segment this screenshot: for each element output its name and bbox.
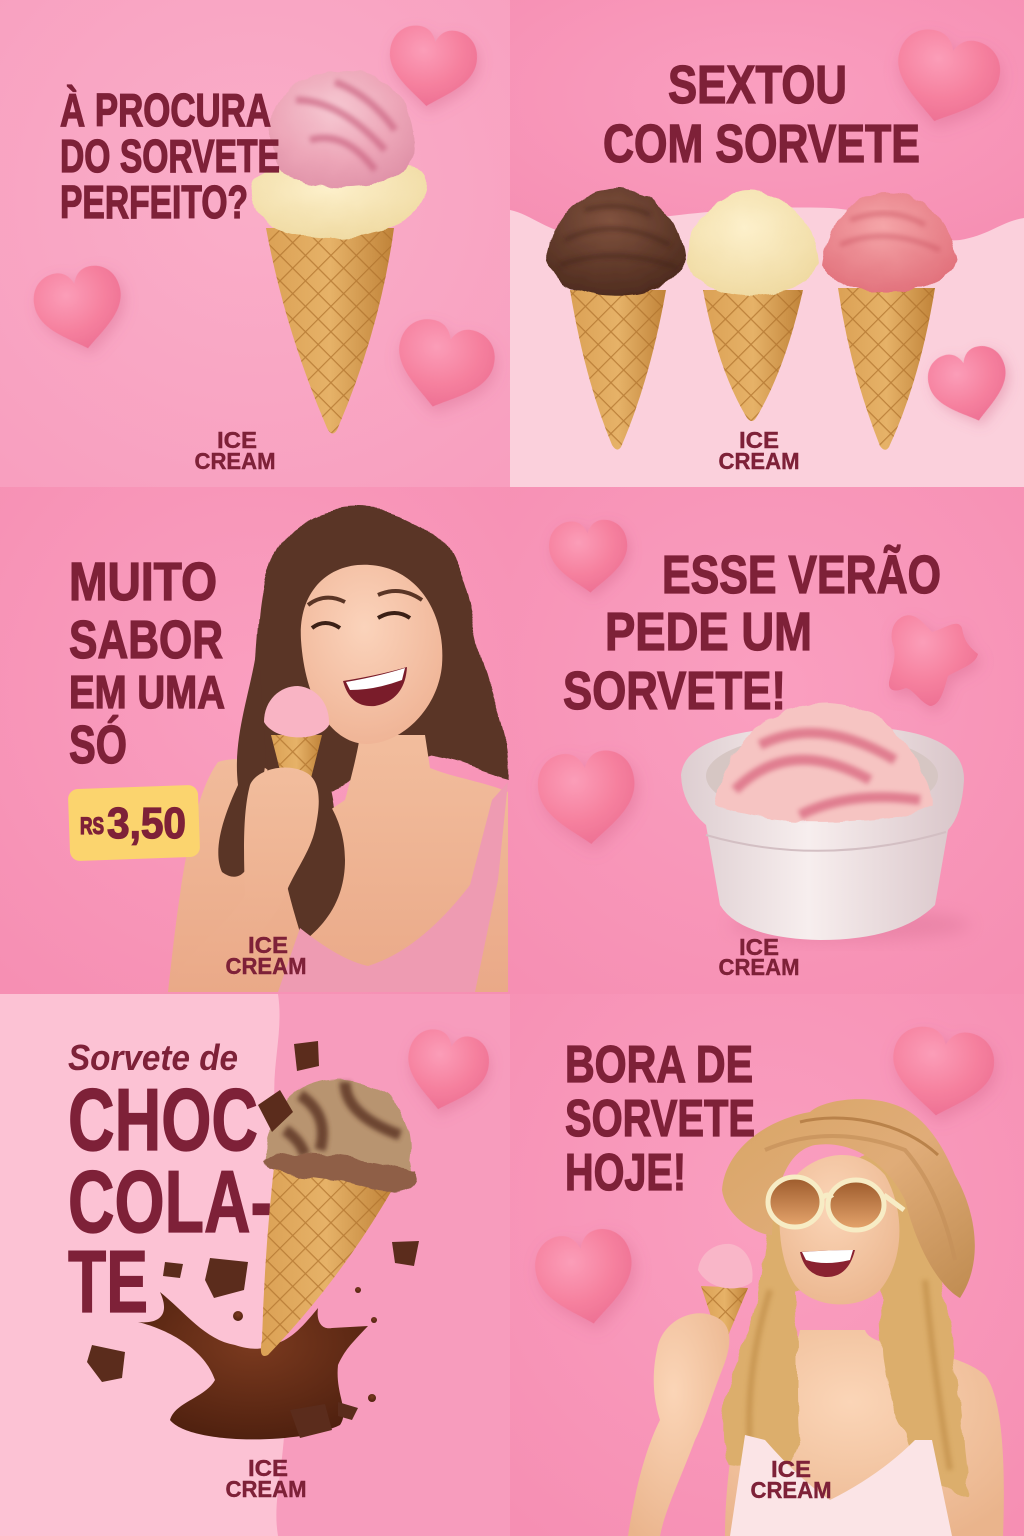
heading: HOJE!: [565, 1144, 686, 1202]
logo: [750, 1456, 832, 1503]
heading: COM SORVETE: [603, 114, 920, 174]
icon: heart top: [383, 22, 481, 112]
heading: SABOR: [69, 610, 223, 670]
hair strand left of arm: [218, 640, 266, 877]
hand and forearm: [168, 768, 319, 992]
heading: SORVETE!: [563, 661, 786, 721]
woman with cone: [168, 506, 510, 992]
icon: heart left: [535, 748, 640, 848]
heading: À PROCURA: [60, 84, 271, 136]
body: [725, 1330, 1004, 1536]
ice cream cone: [251, 70, 427, 434]
hair: [723, 1150, 968, 1495]
hand and forearm: [628, 1313, 729, 1536]
heading: [563, 545, 941, 721]
hat: [722, 1099, 975, 1298]
logo: ICE: [739, 427, 779, 453]
panel: esse verão: [510, 487, 1024, 994]
logo: ICE: [217, 427, 257, 453]
heading: [69, 552, 225, 775]
logo: CREAM: [750, 1477, 832, 1503]
cone in hand: [264, 686, 329, 790]
panel: perfect ice cream: [0, 0, 510, 487]
logo: ICE: [248, 1455, 288, 1481]
heading: [68, 1037, 272, 1331]
price tag: 3,50: [107, 799, 186, 848]
chocolate splash: [138, 1287, 377, 1439]
top: [730, 1435, 952, 1536]
heading: DO SORVETE: [60, 130, 280, 182]
heading: ESSE VERÃO: [662, 545, 941, 605]
logo: ICE: [771, 1456, 811, 1482]
chocolate cone: [261, 1079, 416, 1356]
logo: [226, 1455, 306, 1502]
panel: chocolate: [0, 994, 510, 1536]
icon: heart right: [386, 313, 501, 419]
heading: EM UMA: [69, 666, 225, 718]
heading: COLA-: [68, 1152, 272, 1251]
chocolate cone: [548, 189, 685, 450]
dress: [278, 782, 508, 992]
logo: [226, 932, 306, 979]
icon: heart: [399, 1025, 494, 1118]
heading: SORVETE: [565, 1090, 755, 1148]
price tag: [68, 785, 200, 861]
hair shading: [749, 1280, 950, 1470]
heading: CHOC: [68, 1070, 258, 1169]
logo: CREAM: [226, 953, 306, 979]
price tag: RS: [80, 813, 104, 840]
icon: heart left: [29, 261, 131, 357]
logo: [718, 934, 800, 980]
logo: CREAM: [194, 448, 276, 474]
vanilla cone: [686, 192, 819, 421]
icon: heart top: [886, 1023, 998, 1122]
face: [780, 1155, 899, 1304]
logo: ICE: [248, 932, 288, 958]
heading: BORA DE: [565, 1036, 753, 1094]
logo: CREAM: [718, 448, 800, 474]
heading: PERFEITO?: [60, 176, 248, 228]
logo: [194, 427, 276, 474]
icon: star: [889, 615, 978, 706]
ice cream cup: [681, 702, 970, 941]
heading: SEXTOU: [668, 55, 847, 115]
heading: TE: [68, 1232, 148, 1331]
icon: heart top: [885, 23, 1007, 134]
woman with hat: [628, 1099, 1004, 1536]
logo: [718, 427, 800, 474]
hair strand right of arm: [267, 740, 345, 942]
panel: sextou: [510, 0, 1024, 487]
face: [301, 565, 442, 744]
logo: CREAM: [226, 1476, 306, 1502]
icon: heart top: [548, 519, 630, 595]
icon: heart left: [530, 1225, 641, 1332]
heading: Sorvete de: [68, 1037, 238, 1078]
hair back: [235, 506, 510, 942]
strawberry cone: [822, 192, 957, 450]
heading: [565, 1036, 755, 1202]
cone in hand: [698, 1244, 753, 1350]
logo: ICE: [739, 934, 779, 960]
panel: bora de sorvete: [510, 994, 1024, 1536]
heading: [60, 84, 280, 228]
panel: muito sabor: [0, 487, 510, 994]
icon: heart bottom: [923, 341, 1017, 431]
body: [168, 735, 508, 992]
chocolate chunks: [87, 1041, 419, 1438]
heading: [603, 55, 920, 174]
heading: PEDE UM: [605, 602, 812, 662]
heading: SÓ: [69, 715, 127, 775]
heading: MUITO: [69, 552, 217, 612]
logo: CREAM: [718, 954, 800, 980]
